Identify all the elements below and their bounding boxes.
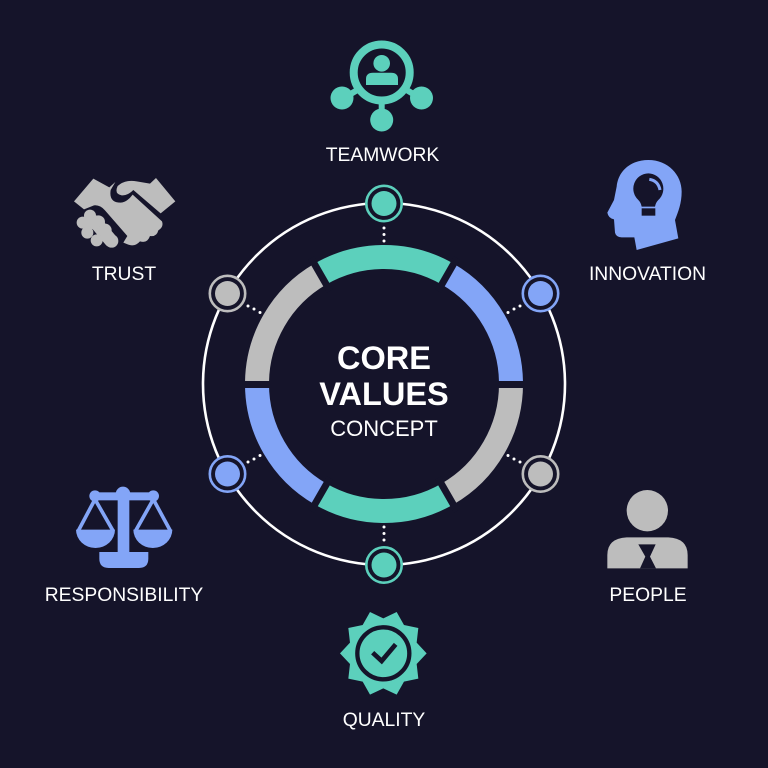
label: responsibility: RESPONSIBILITY: [45, 585, 203, 606]
label: teamwork: TEAMWORK: [326, 145, 439, 166]
icon: people: [607, 490, 688, 568]
central diagram: [203, 186, 565, 583]
segment: upper right blue: [448, 274, 511, 384]
center title: CONCEPT: [330, 416, 438, 441]
label: people: PEOPLE: [609, 585, 687, 606]
node: teamwork: [366, 186, 402, 221]
segment: lower left blue: [257, 384, 320, 494]
label: trust: TRUST: [92, 264, 156, 285]
center title: VALUES: [319, 376, 449, 412]
connector dots: [246, 226, 522, 542]
segment: upper left grey: [257, 274, 320, 384]
segment: lower right grey: [448, 384, 511, 494]
icon: teamwork: [330, 44, 433, 132]
icon: quality badge: [340, 612, 427, 695]
center title: CORE: [337, 340, 431, 376]
node: people: [523, 456, 558, 492]
outer white ring: [203, 203, 565, 565]
icon: innovation head: [607, 160, 682, 250]
icon: handshake: [74, 178, 175, 248]
node: responsibility: [210, 456, 245, 492]
label: quality: QUALITY: [343, 710, 425, 731]
segment: bottom teal: [320, 494, 448, 511]
center title: [319, 340, 449, 441]
node: innovation: [523, 276, 558, 311]
segmented inner ring: [257, 257, 511, 511]
label: innovation: INNOVATION: [589, 264, 706, 285]
icon: scales: [76, 487, 172, 568]
node: quality: [366, 547, 402, 583]
segment: top teal: [320, 257, 448, 274]
node: trust: [210, 276, 245, 311]
